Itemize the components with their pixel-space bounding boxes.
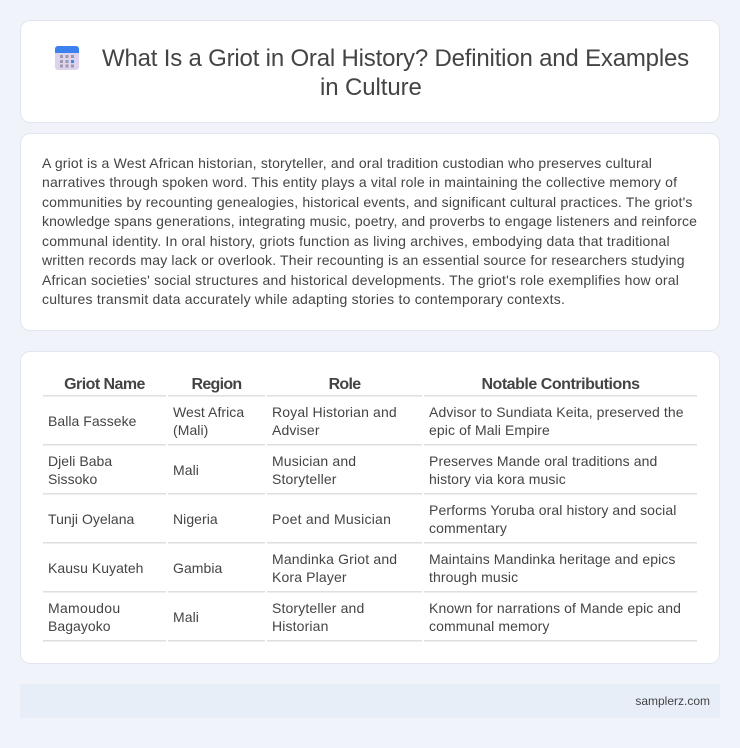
- table row: Balla Fasseke: Royal Historian and: [272, 404, 397, 420]
- table row: Balla Fasseke: (Mali): [173, 422, 208, 438]
- footer: samplerz.com: [635, 694, 710, 708]
- table row: Djeli Baba Sissoko: Mali: [173, 462, 199, 478]
- table row: Kausu Kuyateh: through music: [429, 569, 518, 585]
- table row: Balla Fasseke: Advisor to Sundiata Keita, preserved the: [429, 404, 684, 420]
- table row: Tunji Oyelana: commentary: [429, 520, 507, 536]
- table row: Tunji Oyelana: Nigeria: [173, 511, 218, 527]
- table row: Djeli Baba Sissoko: Djeli Baba: [48, 453, 112, 469]
- table row: Kausu Kuyateh: Maintains Mandinka heritage and epics: [429, 551, 676, 567]
- text block: description: communal identity. In oral history, griots function as living archives, embodying data that traditional: [42, 233, 670, 249]
- table row: Mamoudou Bagayoko: Mali: [173, 609, 199, 625]
- text block: description: written records may lack or overlook. Their recounting is an essential source for researchers studying: [42, 252, 685, 268]
- footer: [20, 684, 720, 718]
- table row: Kausu Kuyateh: Kausu Kuyateh: [48, 560, 143, 576]
- table row: Balla Fasseke: West Africa: [173, 404, 244, 420]
- table row: Djeli Baba Sissoko: Sissoko: [48, 471, 97, 487]
- table row: Mamoudou Bagayoko: Known for narrations of Mande epic and: [429, 600, 681, 616]
- table row: Djeli Baba Sissoko: [43, 453, 697, 495]
- table row: Balla Fasseke: [43, 404, 697, 446]
- table row: Djeli Baba Sissoko: Preserves Mande oral traditions and: [429, 453, 657, 469]
- griot table: [43, 376, 697, 642]
- table row: Mamoudou Bagayoko: Mamoudou: [48, 600, 120, 616]
- table row: Djeli Baba Sissoko: Musician and: [272, 453, 356, 469]
- table row: Mamoudou Bagayoko: [43, 600, 697, 642]
- table row: Balla Fasseke: Balla Fasseke: [48, 413, 136, 429]
- table header: Griot Name: [64, 376, 145, 393]
- table header: Notable Contributions: [481, 376, 640, 393]
- text block: description: knowledge spans generations, integrating music, poetry, and proverbs to engage listeners and reinforce: [42, 213, 697, 229]
- text block: description: communities by recounting genealogies, historical events, and significant cultural practices. The griot's: [42, 194, 693, 210]
- table row: Kausu Kuyateh: Gambia: [173, 560, 222, 576]
- panel: table: [20, 351, 720, 664]
- table row: Tunji Oyelana: Poet and Musician: [272, 511, 391, 527]
- panel: header: [20, 20, 720, 123]
- table row: Kausu Kuyateh: [43, 551, 697, 593]
- text block: description: African societies' social structures and historical developments. The griot's role exemplifies how oral: [42, 272, 679, 288]
- text block: description: A griot is a West African historian, storyteller, and oral tradition custodian who preserves cultural: [42, 155, 652, 171]
- panel: description: [20, 133, 720, 331]
- table row: Djeli Baba Sissoko: history via kora music: [429, 471, 566, 487]
- table row: Kausu Kuyateh: Mandinka Griot and: [272, 551, 397, 567]
- text block: description: cultures transmit data accurately while adapting stories to contemporary contexts.: [42, 291, 565, 307]
- title: in Culture: [320, 74, 422, 101]
- text block: description: [42, 155, 697, 307]
- table row: Mamoudou Bagayoko: Bagayoko: [48, 618, 111, 634]
- table row: Mamoudou Bagayoko: Historian: [272, 618, 329, 634]
- table header: [43, 376, 697, 397]
- table row: Balla Fasseke: epic of Mali Empire: [429, 422, 550, 438]
- table row: Tunji Oyelana: [43, 502, 697, 544]
- title: [102, 45, 689, 101]
- table row: Djeli Baba Sissoko: Storyteller: [272, 471, 337, 487]
- table row: Tunji Oyelana: Performs Yoruba oral history and social: [429, 502, 676, 518]
- title: What Is a Griot in Oral History? Definition and Examples: [102, 45, 689, 72]
- table row: Tunji Oyelana: Tunji Oyelana: [48, 511, 134, 527]
- table row: Mamoudou Bagayoko: Storyteller and: [272, 600, 364, 616]
- text block: description: narratives through spoken word. This entity plays a vital role in maintaining the collective memory of: [42, 174, 677, 190]
- table header: Role: [329, 376, 360, 393]
- table row: Mamoudou Bagayoko: communal memory: [429, 618, 550, 634]
- table row: Balla Fasseke: Adviser: [272, 422, 320, 438]
- table row: Kausu Kuyateh: Kora Player: [272, 569, 347, 585]
- icon: calendar: [55, 46, 79, 70]
- table header: Region: [191, 376, 242, 393]
